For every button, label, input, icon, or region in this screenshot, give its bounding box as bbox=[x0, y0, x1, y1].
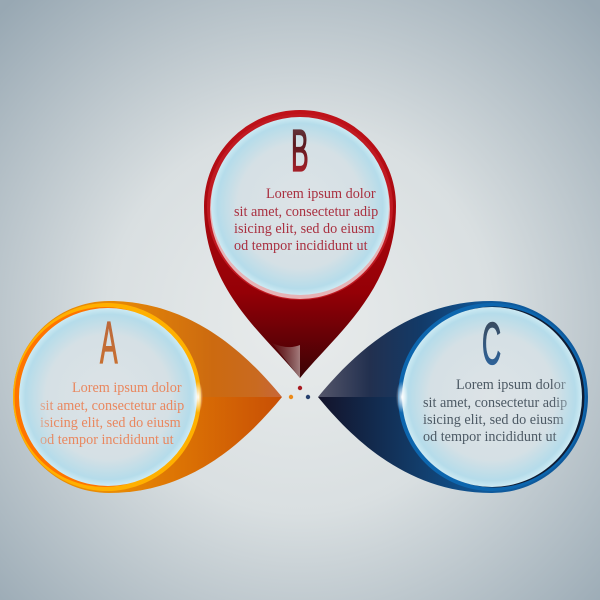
lens C bbox=[402, 307, 582, 487]
text C: od tempor incididunt ut bbox=[423, 429, 557, 445]
text B: sit amet, consectetur adip bbox=[234, 204, 378, 220]
text A: sit amet, consectetur adip bbox=[40, 398, 184, 414]
text A bbox=[40, 380, 184, 448]
ring B bbox=[207, 114, 393, 300]
text C: Lorem ipsum dolor bbox=[456, 377, 566, 393]
text B bbox=[234, 186, 378, 254]
letter B: B bbox=[291, 117, 309, 184]
teardrop body B bbox=[204, 110, 396, 378]
panel: B teardrop bbox=[204, 110, 396, 378]
text C: isicing elit, sed do eiusm bbox=[423, 412, 564, 428]
text C bbox=[423, 377, 567, 445]
lens A bbox=[19, 308, 197, 486]
letter A: A bbox=[100, 309, 118, 376]
panel: C teardrop bbox=[318, 301, 588, 493]
teardrop body C bbox=[318, 301, 588, 493]
text B: od tempor incididunt ut bbox=[234, 238, 368, 254]
ring A bbox=[13, 303, 201, 491]
center dots bbox=[289, 386, 310, 399]
text A: Lorem ipsum dolor bbox=[72, 380, 182, 396]
text A: od tempor incididunt ut bbox=[40, 432, 174, 448]
lens B bbox=[211, 117, 389, 295]
teardrop body A bbox=[13, 301, 282, 493]
ring C bbox=[398, 303, 586, 491]
letter C: C bbox=[482, 310, 501, 377]
text A: isicing elit, sed do eiusm bbox=[40, 415, 181, 431]
text B: isicing elit, sed do eiusm bbox=[234, 221, 375, 237]
text C: sit amet, consectetur adip bbox=[423, 395, 567, 411]
text B: Lorem ipsum dolor bbox=[266, 186, 376, 202]
panel: A teardrop bbox=[13, 301, 282, 493]
